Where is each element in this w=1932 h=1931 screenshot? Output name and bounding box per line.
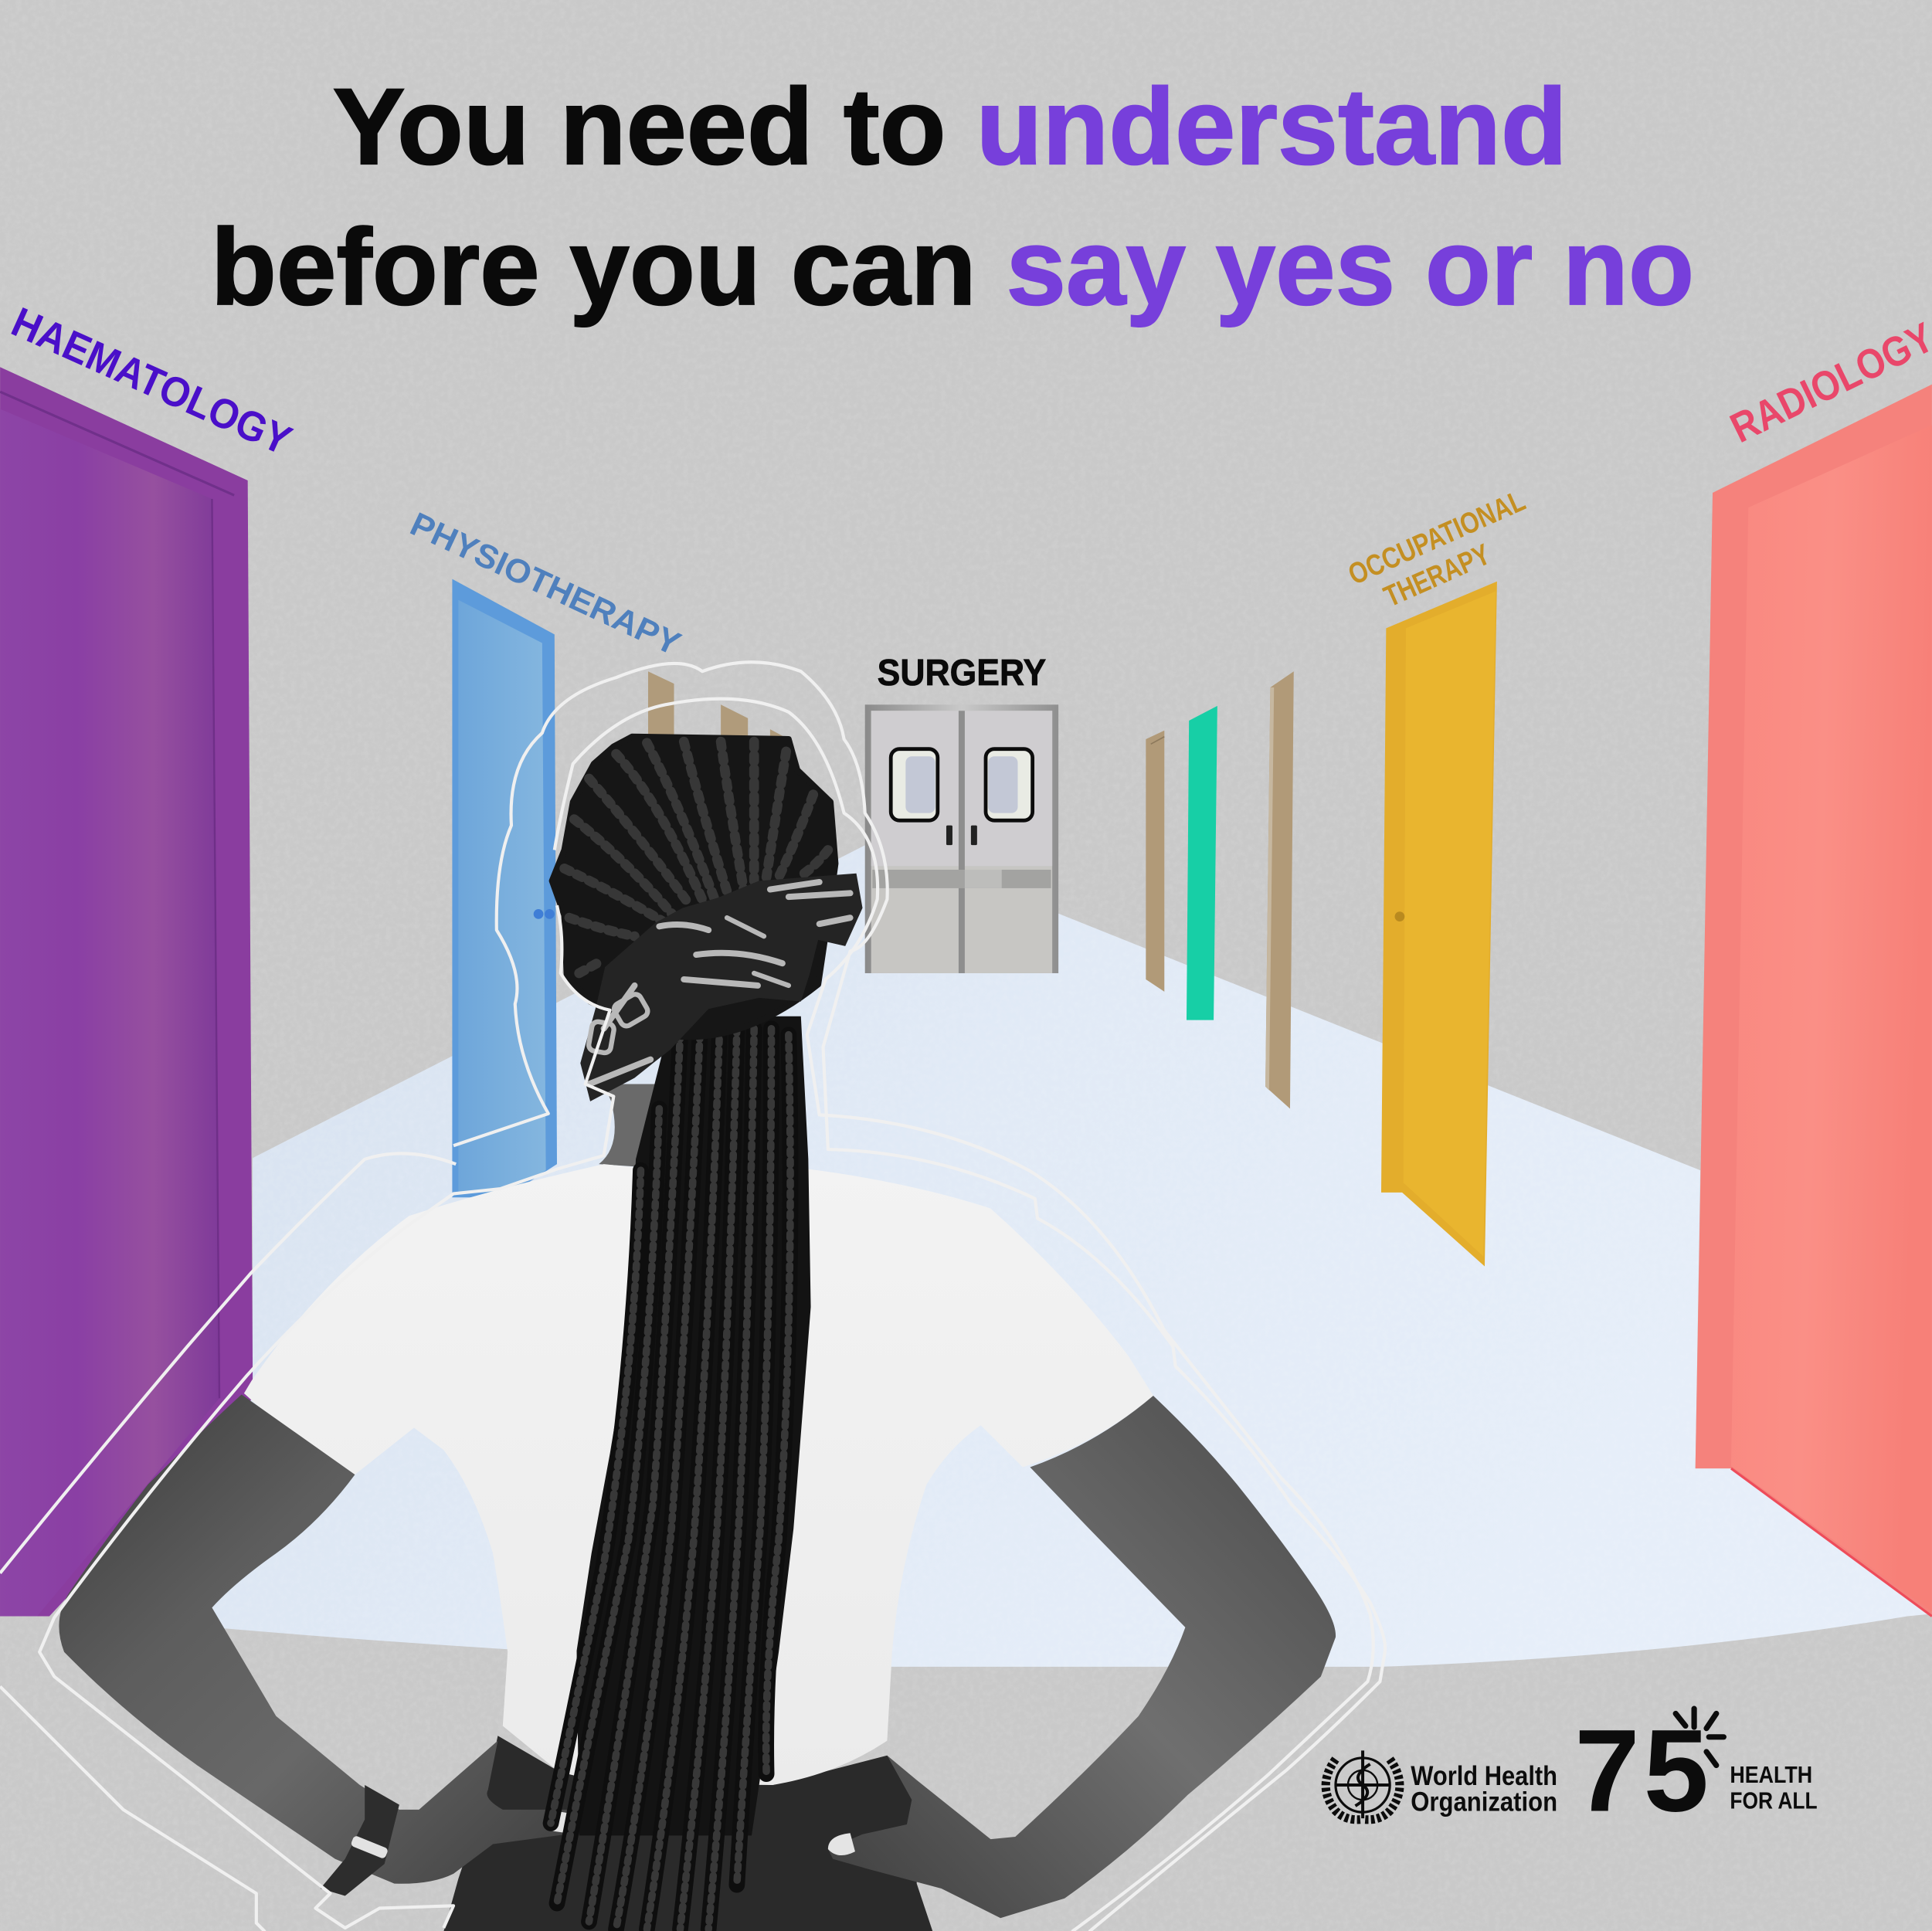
- fingernails: [549, 1811, 855, 1855]
- neck: [599, 1084, 690, 1170]
- emblem: [1326, 1750, 1400, 1820]
- title: before you can say yes or no: [211, 206, 1694, 327]
- scarf: [580, 874, 863, 1101]
- small far doors left: [648, 671, 789, 739]
- door: occupational therapy: [1381, 582, 1497, 1267]
- logo: World Health Organization: [1326, 1750, 1557, 1820]
- door: surgery double doors: [865, 704, 1058, 973]
- logo: World Health Organization: World Health: [1411, 1761, 1557, 1791]
- right arm: [828, 1396, 1336, 1918]
- door: near tan door: [1265, 671, 1294, 1108]
- label: occupational therapy: [1343, 484, 1530, 614]
- door: far tan door: [1146, 731, 1164, 992]
- logo: 75 health for all: 75: [1574, 1705, 1709, 1836]
- label: haematology: HAEMATOLOGY: [5, 299, 298, 464]
- label: physiotherapy: PHYSIOTHERAPY: [405, 506, 686, 663]
- door: physiotherapy: [452, 579, 557, 1197]
- door: teal: [1187, 706, 1217, 1020]
- scarf pattern: [588, 882, 851, 1084]
- person from behind: [59, 737, 1336, 1931]
- white outline: head and body silhouettes: [0, 662, 1385, 1931]
- door: haematology: [0, 367, 253, 1617]
- left arm: [59, 1394, 567, 1884]
- door: radiology: [1696, 385, 1932, 1617]
- long braids: [551, 1029, 790, 1929]
- title: [211, 66, 1694, 327]
- watch band: [321, 1785, 399, 1896]
- long braids mass: [577, 1016, 811, 1835]
- logo: 75 health for all: [1574, 1705, 1818, 1836]
- white t-shirt: [244, 1164, 1153, 1785]
- logo: 75 health for all: FOR ALL: [1730, 1788, 1818, 1814]
- logo: 75 health for all: HEALTH: [1730, 1763, 1812, 1788]
- hair braid rows: [565, 742, 828, 973]
- label: occupational therapy: THERAPY: [1379, 538, 1495, 614]
- hair bun: [552, 737, 835, 1037]
- label: occupational therapy: OCCUPATIONAL: [1343, 484, 1530, 592]
- jeans: [443, 1736, 932, 1931]
- rays: [1676, 1709, 1723, 1765]
- title: You need to understand: [333, 66, 1567, 187]
- floor: [203, 840, 1932, 1667]
- label: surgery: SURGERY: [878, 653, 1046, 694]
- logo: World Health Organization: Organization: [1411, 1787, 1557, 1817]
